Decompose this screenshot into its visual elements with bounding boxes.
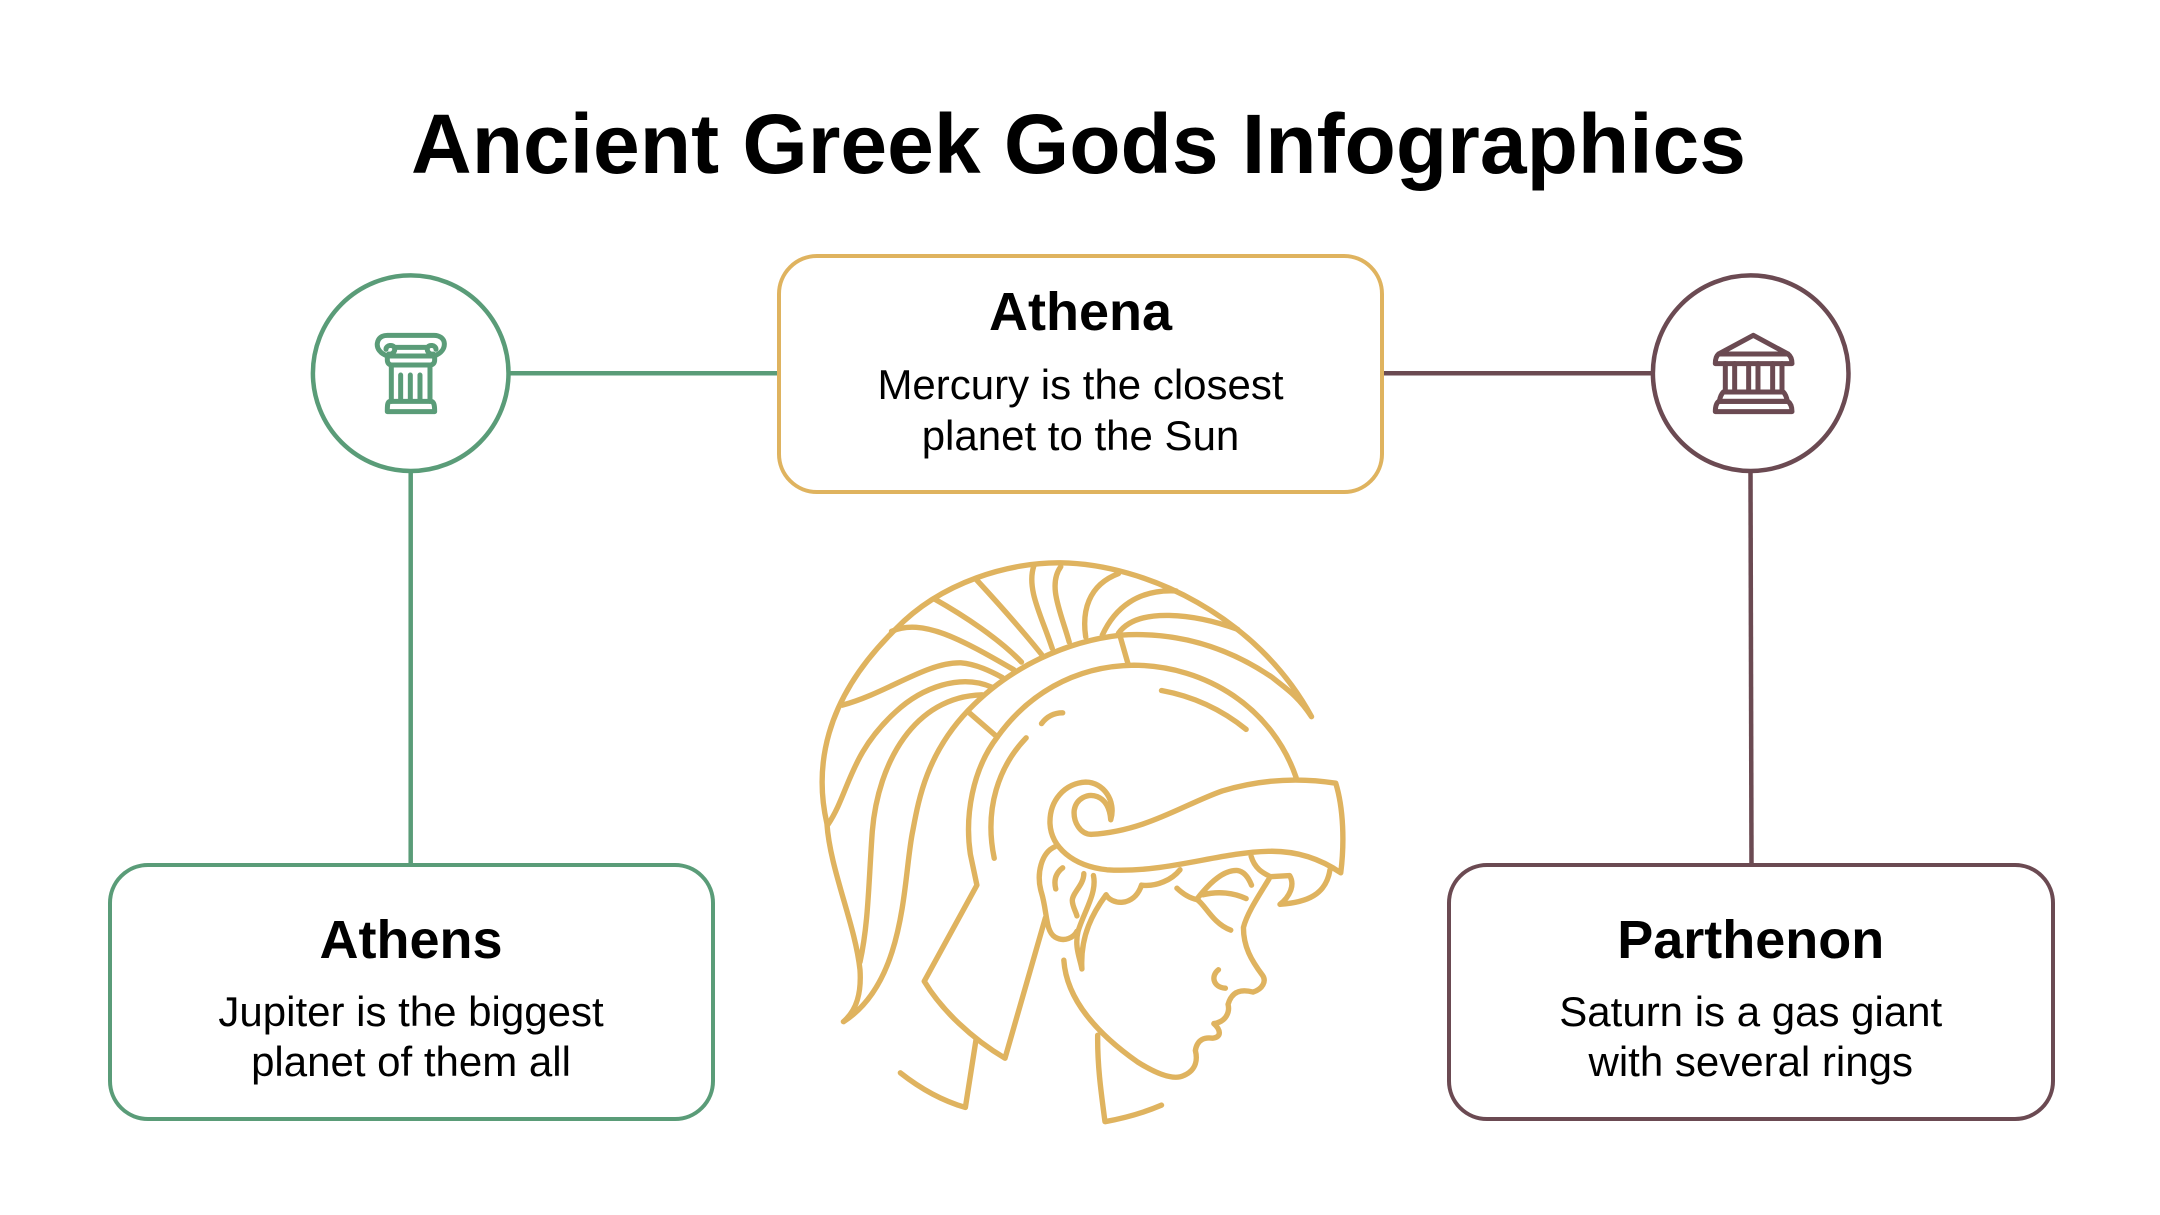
icon: greek temple [1715,335,1792,412]
heading: Athens: Athens [319,910,502,970]
text: Athens description: Jupiter is the biggest [218,988,604,1034]
text: Athena description: planet to the Sun [922,412,1239,458]
connector: right circle to Parthenon [1750,469,1752,865]
illustration: Athena helmet head [822,563,1343,1122]
right circle [1653,275,1848,471]
title: Ancient Greek Gods Infographics [411,97,1746,191]
connector: Athena to right circle [1381,371,1653,376]
text: Parthenon description: Saturn is a gas giant [1559,988,1942,1034]
text: Parthenon description: with several rings [1589,1038,1913,1084]
text: Athena description [877,360,1284,458]
panel: Athena [777,254,1384,494]
connector: left circle to Athens [408,469,413,865]
panel: Parthenon [1447,862,2054,1120]
panel: Athens [108,862,714,1120]
heading: Parthenon: Parthenon [1617,910,1884,970]
heading: Athena: Athena [989,282,1172,342]
text: Athena description: Mercury is the closest [877,360,1284,408]
left circle [313,275,509,471]
connector: left circle to Athena [507,371,779,376]
text: Athens description: planet of them all [251,1038,571,1084]
text: Parthenon description [1559,988,1942,1084]
text: Athens description [218,988,604,1084]
icon: ionic column [377,335,444,412]
